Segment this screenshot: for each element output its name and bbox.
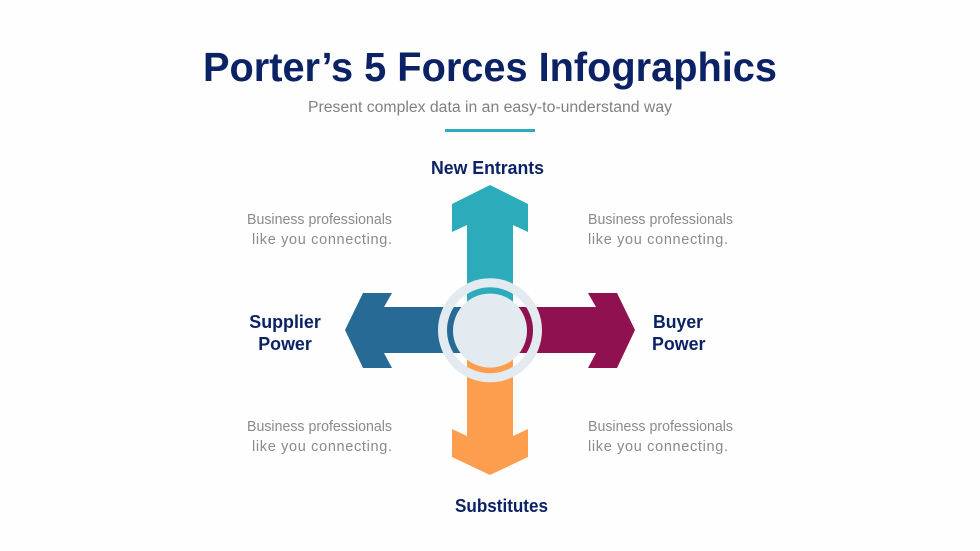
- text block: top left: Business professionals: [247, 212, 392, 228]
- label: buyer power: Buyer: [653, 311, 703, 332]
- text block: bottom right: [588, 419, 733, 455]
- arrow: new entrants (up): [452, 185, 528, 330]
- title underline: [445, 129, 535, 132]
- center hub: [442, 283, 538, 378]
- label: supplier power: Power: [258, 333, 312, 354]
- label: supplier power: [249, 311, 321, 354]
- label: new entrants: New Entrants: [431, 157, 544, 178]
- text block: bottom right: Business professionals: [588, 419, 733, 435]
- hub ring: [442, 283, 538, 378]
- arrow: supplier power (left): [345, 293, 490, 368]
- label: substitutes: Substitutes: [455, 495, 548, 516]
- text block: bottom left: Business professionals: [247, 419, 392, 435]
- title: Porter’s 5 Forces Infographics: [203, 44, 777, 90]
- text block: bottom left: [247, 419, 392, 455]
- label: supplier power: Supplier: [249, 311, 321, 332]
- label: buyer power: Power: [652, 333, 706, 354]
- hub disc: [453, 294, 527, 368]
- text block: bottom left: like you connecting.: [252, 439, 392, 455]
- text block: top right: [588, 212, 733, 248]
- subtitle: Present complex data in an easy-to-understand way: [308, 99, 672, 116]
- text block: top right: Business professionals: [588, 212, 733, 228]
- arrow: buyer power (right): [490, 293, 635, 368]
- label: buyer power: [652, 311, 706, 354]
- arrow: substitutes (down): [452, 330, 528, 475]
- text block: top right: like you connecting.: [588, 232, 728, 248]
- text block: bottom right: like you connecting.: [588, 439, 728, 455]
- text block: top left: like you connecting.: [252, 232, 392, 248]
- text block: top left: [247, 212, 392, 248]
